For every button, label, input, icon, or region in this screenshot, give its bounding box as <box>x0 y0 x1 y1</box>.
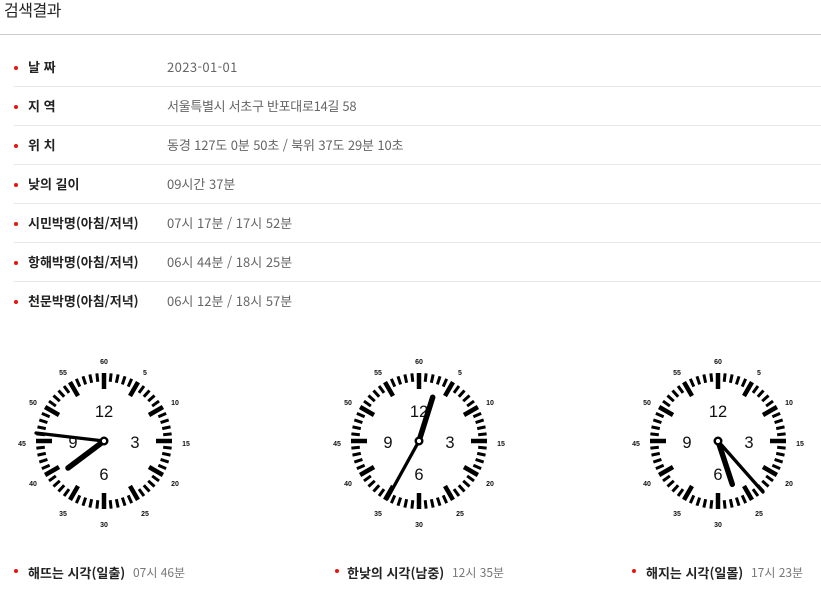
clock: sunrise: 50 <box>29 400 37 407</box>
clock: sunset: 40 <box>643 481 651 488</box>
clock: solar noon: 15 <box>497 441 505 448</box>
row: region <box>14 87 821 126</box>
clock: solar noon: 55 <box>374 370 382 377</box>
clock: sunrise: 30 <box>100 522 108 529</box>
clock: solar noon: 35 <box>374 511 382 518</box>
title rule <box>0 34 821 35</box>
row: nautical twilight: 항해박명(아침/저녁) <box>28 252 139 271</box>
row: nautical twilight: 06시 44분 / 18시 25분 <box>167 252 292 271</box>
row: date: 날 짜 <box>28 57 56 76</box>
clock: sunrise: 10 <box>171 400 179 407</box>
clock: sunset: 3 <box>744 434 754 452</box>
row: position: 동경 127도 0분 50초 / 북위 37도 29분 10초 <box>167 135 403 154</box>
row: position: 위 치 <box>28 135 56 154</box>
clock: sunset: 55 <box>673 370 681 377</box>
row: day length <box>14 165 821 204</box>
clock: sunrise: 40 <box>29 481 37 488</box>
row: astronomical twilight: 천문박명(아침/저녁) <box>28 291 139 310</box>
clock: solar noon: 5 <box>458 370 462 377</box>
row: civil twilight: 시민박명(아침/저녁) <box>28 213 139 232</box>
clock: solar noon: 12 <box>410 403 428 421</box>
row: date <box>14 48 821 87</box>
row: date: 2023-01-01 <box>167 57 238 76</box>
clock: sunrise <box>18 359 190 529</box>
clock: sunrise: 9 <box>68 434 78 452</box>
clock: sunset: 50 <box>643 400 651 407</box>
row: region: 서울특별시 서초구 반포대로14길 58 <box>167 96 356 115</box>
clock: solar noon: 45 <box>333 441 341 448</box>
clock: sunset: 15 <box>796 441 804 448</box>
caption: sunset <box>632 563 803 582</box>
clock: sunrise: 5 <box>143 370 147 377</box>
clock: sunrise: 12 <box>95 403 113 421</box>
clock: sunset: 10 <box>785 400 793 407</box>
row: astronomical twilight <box>14 291 292 310</box>
clock: sunrise: 60 <box>100 359 108 366</box>
caption: sunrise <box>14 563 185 582</box>
clock: sunrise: 15 <box>182 441 190 448</box>
clock: solar noon <box>333 359 505 529</box>
clock: solar noon: 50 <box>344 400 352 407</box>
row: astronomical twilight: 06시 12분 / 18시 57분 <box>167 291 292 310</box>
clock: sunset: 12 <box>709 403 727 421</box>
row: day length: 09시간 37분 <box>167 174 235 193</box>
clock: sunset: 9 <box>682 434 692 452</box>
row: day length: 낮의 길이 <box>28 174 79 193</box>
caption: sunset: 해지는 시각(일몰) <box>646 563 743 582</box>
clock: sunset: 5 <box>757 370 761 377</box>
caption: sunrise: 07시 46분 <box>133 564 185 581</box>
clock: sunset: 45 <box>632 441 640 448</box>
clock: sunrise: 6 <box>99 466 109 484</box>
clock: solar noon: 25 <box>456 511 464 518</box>
caption: solar noon: 한낮의 시각(남중) <box>347 563 444 582</box>
clock: solar noon: 30 <box>415 522 423 529</box>
clock: solar noon: 60 <box>415 359 423 366</box>
caption: sunset: 17시 23분 <box>751 564 803 581</box>
clock: sunset: 25 <box>755 511 763 518</box>
clock: sunrise: 55 <box>59 370 67 377</box>
clock: sunrise: 35 <box>59 511 67 518</box>
clock: solar noon: 20 <box>486 481 494 488</box>
caption: sunrise: 해뜨는 시각(일출) <box>28 563 125 582</box>
clock: sunrise: 20 <box>171 481 179 488</box>
clock: sunset: 20 <box>785 481 793 488</box>
clock: solar noon: 6 <box>414 466 424 484</box>
row: civil twilight: 07시 17분 / 17시 52분 <box>167 213 292 232</box>
clock: sunset: 30 <box>714 522 722 529</box>
row: region: 지 역 <box>28 96 56 115</box>
clock: sunrise: 3 <box>130 434 140 452</box>
clock: solar noon: 40 <box>344 481 352 488</box>
row: position <box>14 126 821 165</box>
caption: solar noon: 12시 35분 <box>452 564 504 581</box>
clock: solar noon: 3 <box>445 434 455 452</box>
clock: sunrise: 45 <box>18 441 26 448</box>
clock: sunset <box>632 359 804 529</box>
row: civil twilight <box>14 204 821 243</box>
caption: solar noon <box>335 563 504 582</box>
clock: sunset: 35 <box>673 511 681 518</box>
clock: sunset: 6 <box>713 466 723 484</box>
clock: solar noon: 10 <box>486 400 494 407</box>
clock: solar noon: 9 <box>383 434 393 452</box>
clock: sunrise: 25 <box>141 511 149 518</box>
clock: sunset: 60 <box>714 359 722 366</box>
row: nautical twilight <box>14 243 821 282</box>
